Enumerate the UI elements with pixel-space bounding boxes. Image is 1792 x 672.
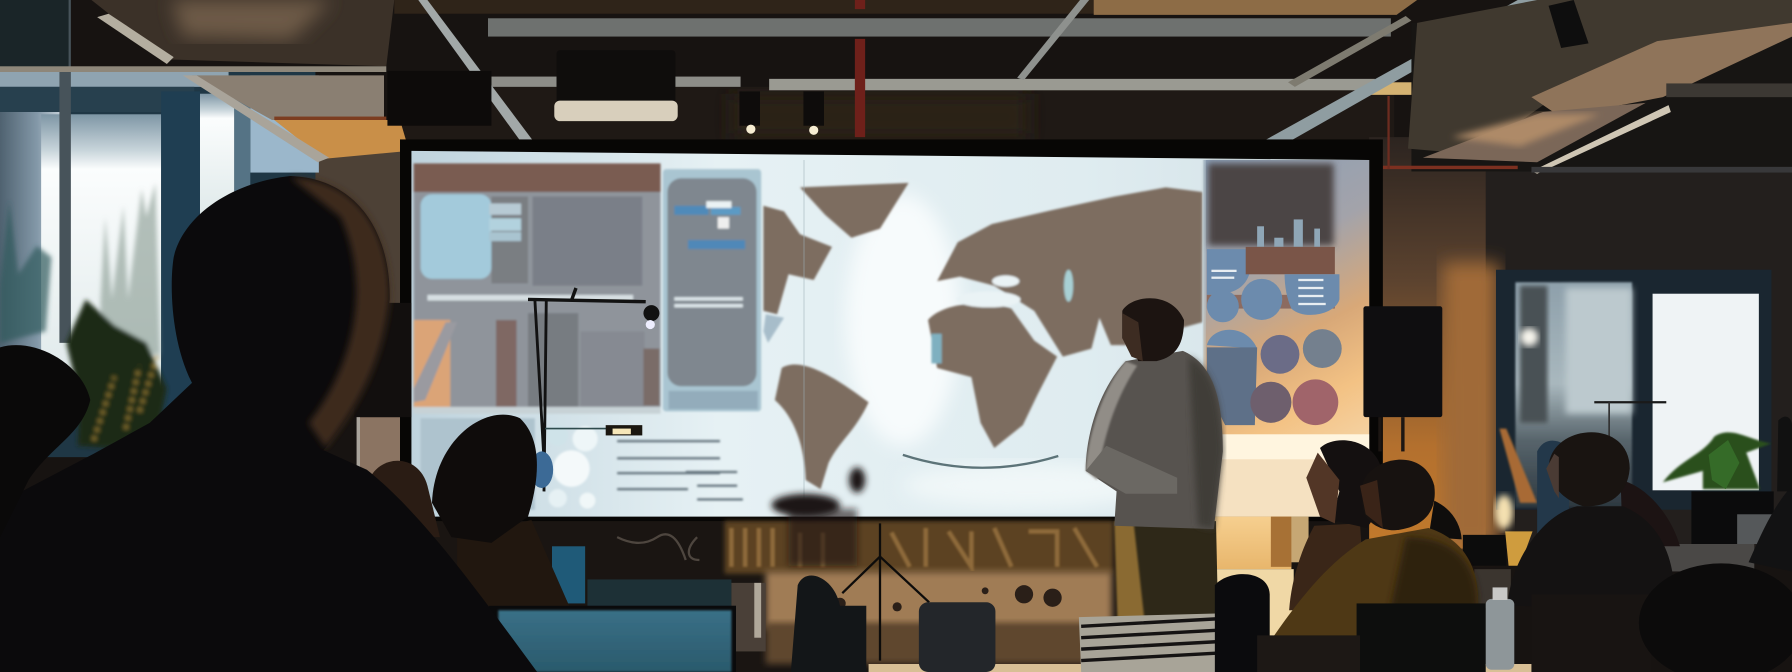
spotlights <box>739 91 824 135</box>
ceiling speaker <box>387 71 491 126</box>
map: south america <box>775 365 869 489</box>
potted plant <box>1663 432 1774 544</box>
plant silhouette in front of the screen <box>771 467 865 566</box>
plants in left window <box>0 183 167 448</box>
arrow: map curve <box>903 455 1058 468</box>
tripod <box>842 523 929 661</box>
map: africa <box>928 304 1057 448</box>
projection screen <box>400 139 1383 521</box>
presenter trousers <box>1114 521 1218 626</box>
map: eurasia and arabia <box>937 187 1202 357</box>
brick wall under the screen with graffiti <box>411 517 1309 672</box>
projector <box>554 50 678 121</box>
chart: world map <box>763 183 1202 489</box>
wall holes <box>834 585 1062 611</box>
speakers <box>354 303 1442 469</box>
left window <box>0 0 319 457</box>
audience person in blue behind <box>1537 441 1571 537</box>
audience woman <box>1289 440 1383 610</box>
warm lamp and desk items <box>1463 495 1783 608</box>
monitors and desks in the foreground <box>489 546 1600 672</box>
person behind the bald man <box>1429 501 1462 539</box>
audience man on the right <box>1507 432 1674 608</box>
bottle and foreground furniture <box>1257 417 1792 672</box>
microphone stand on screen <box>528 288 659 491</box>
graffiti lettering <box>731 528 1097 567</box>
panel: lower list with bubbles <box>421 418 743 510</box>
panel: dashboard centre phone <box>663 169 761 411</box>
right window <box>1496 270 1771 510</box>
presenter shirt <box>1086 351 1223 529</box>
ceiling structure <box>0 0 1792 174</box>
audience person with long hair <box>366 415 569 606</box>
audience chair <box>1079 574 1270 672</box>
map: seas and islands <box>957 270 1073 307</box>
person behind right man <box>1621 480 1680 546</box>
audience bald man <box>1274 460 1478 643</box>
panel: dashboard left <box>414 163 661 414</box>
presenter <box>1086 298 1223 626</box>
presenter head <box>1122 298 1184 361</box>
audience silhouette foreground large <box>0 176 537 672</box>
panel: right infographic with warm glow <box>1203 160 1369 517</box>
map: greenland and north america <box>763 183 909 343</box>
